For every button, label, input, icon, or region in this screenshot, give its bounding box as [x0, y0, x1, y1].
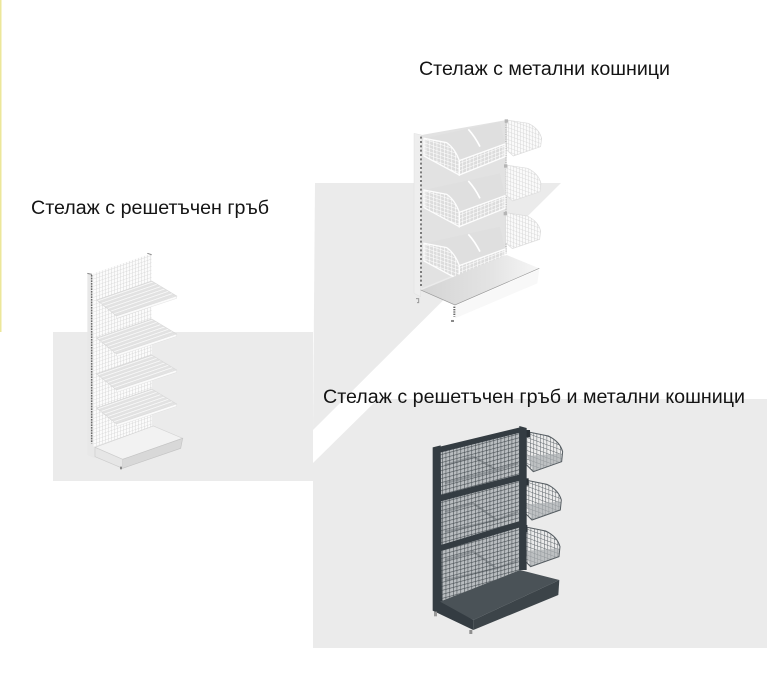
back panel [422, 120, 507, 288]
front baskets [424, 122, 505, 280]
illustration: dark shelf unit with mesh back and baskets [433, 426, 563, 634]
background panel: upper grey triangle [313, 183, 561, 430]
yellow edge line [0, 0, 2, 332]
mesh back panel [440, 430, 520, 602]
left post [87, 273, 95, 458]
base [416, 255, 539, 322]
illustration: white shelf unit with baskets [414, 119, 542, 322]
heading: shelf with mesh back and metal baskets: Стелаж с решетъчен гръб и метални кошници [323, 386, 745, 408]
heading: shelf with mesh back: Стелаж с решетъчен гръб [31, 197, 269, 219]
heading: shelf with metal baskets: Стелаж с метални кошници [419, 58, 670, 80]
side baskets [522, 430, 563, 567]
background panel: left grey rectangle [53, 332, 313, 481]
base [434, 570, 559, 634]
left post [414, 133, 422, 297]
wire shelves [97, 281, 177, 426]
background panel: lower grey shape [313, 399, 767, 648]
mesh back panel [93, 253, 152, 447]
hanging baskets seen through the mesh [445, 457, 518, 580]
frame [433, 426, 527, 630]
illustration: white shelf unit with mesh back [87, 253, 183, 469]
base [95, 426, 183, 469]
side baskets [504, 119, 542, 249]
